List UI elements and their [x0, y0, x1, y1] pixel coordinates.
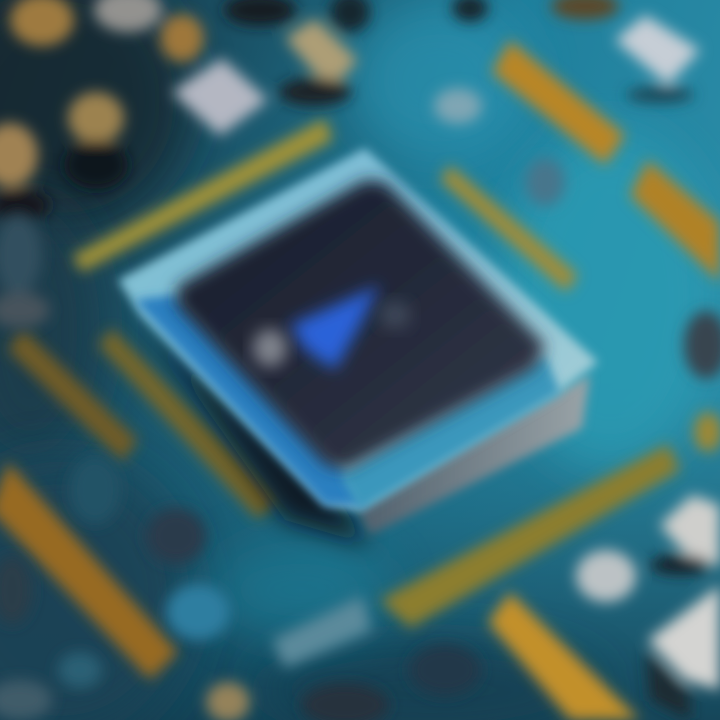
tan component — [285, 18, 358, 92]
small white pad — [434, 88, 482, 124]
chip rim — [118, 148, 598, 510]
dark chip — [146, 508, 206, 564]
dark parts — [330, 0, 370, 32]
components: lower board — [0, 311, 720, 720]
dark part right — [684, 311, 720, 379]
tan bead — [206, 682, 250, 720]
gold traces: lower row — [0, 328, 720, 720]
trace upper right of chip — [440, 165, 578, 292]
trace bottom center — [380, 444, 680, 628]
gray traces — [0, 680, 52, 720]
rim blue lower right — [340, 355, 560, 510]
small grey pad — [525, 158, 565, 206]
bead — [0, 123, 38, 187]
trace left long — [98, 328, 278, 520]
chip core — [176, 180, 545, 470]
chip side — [355, 375, 590, 535]
pad right — [694, 412, 720, 452]
white component right — [660, 495, 720, 565]
trace far right — [630, 160, 720, 282]
bead — [10, 0, 74, 46]
shadow under top right component — [626, 87, 694, 103]
large white component — [648, 585, 720, 690]
chip — [118, 148, 598, 545]
rim blue lower left — [135, 295, 365, 505]
bead — [68, 92, 124, 144]
trace bottom left — [0, 462, 178, 680]
trace top right thick — [492, 40, 625, 165]
dark oval — [409, 644, 481, 696]
chip shadow — [150, 330, 370, 545]
white component top right — [615, 15, 700, 85]
dark oval — [301, 683, 389, 720]
trace left short — [8, 328, 138, 462]
gold traces: upper row — [72, 40, 720, 292]
trace bottom right — [488, 592, 640, 720]
white component — [172, 58, 268, 136]
components: top and left — [0, 0, 700, 328]
white component bottom — [576, 550, 636, 602]
icon: blue logo glow — [253, 285, 411, 370]
grey-blue block — [272, 596, 372, 668]
bead — [160, 14, 204, 62]
trace upper left — [72, 118, 333, 272]
grey component — [94, 0, 162, 32]
blue pad — [166, 584, 230, 640]
